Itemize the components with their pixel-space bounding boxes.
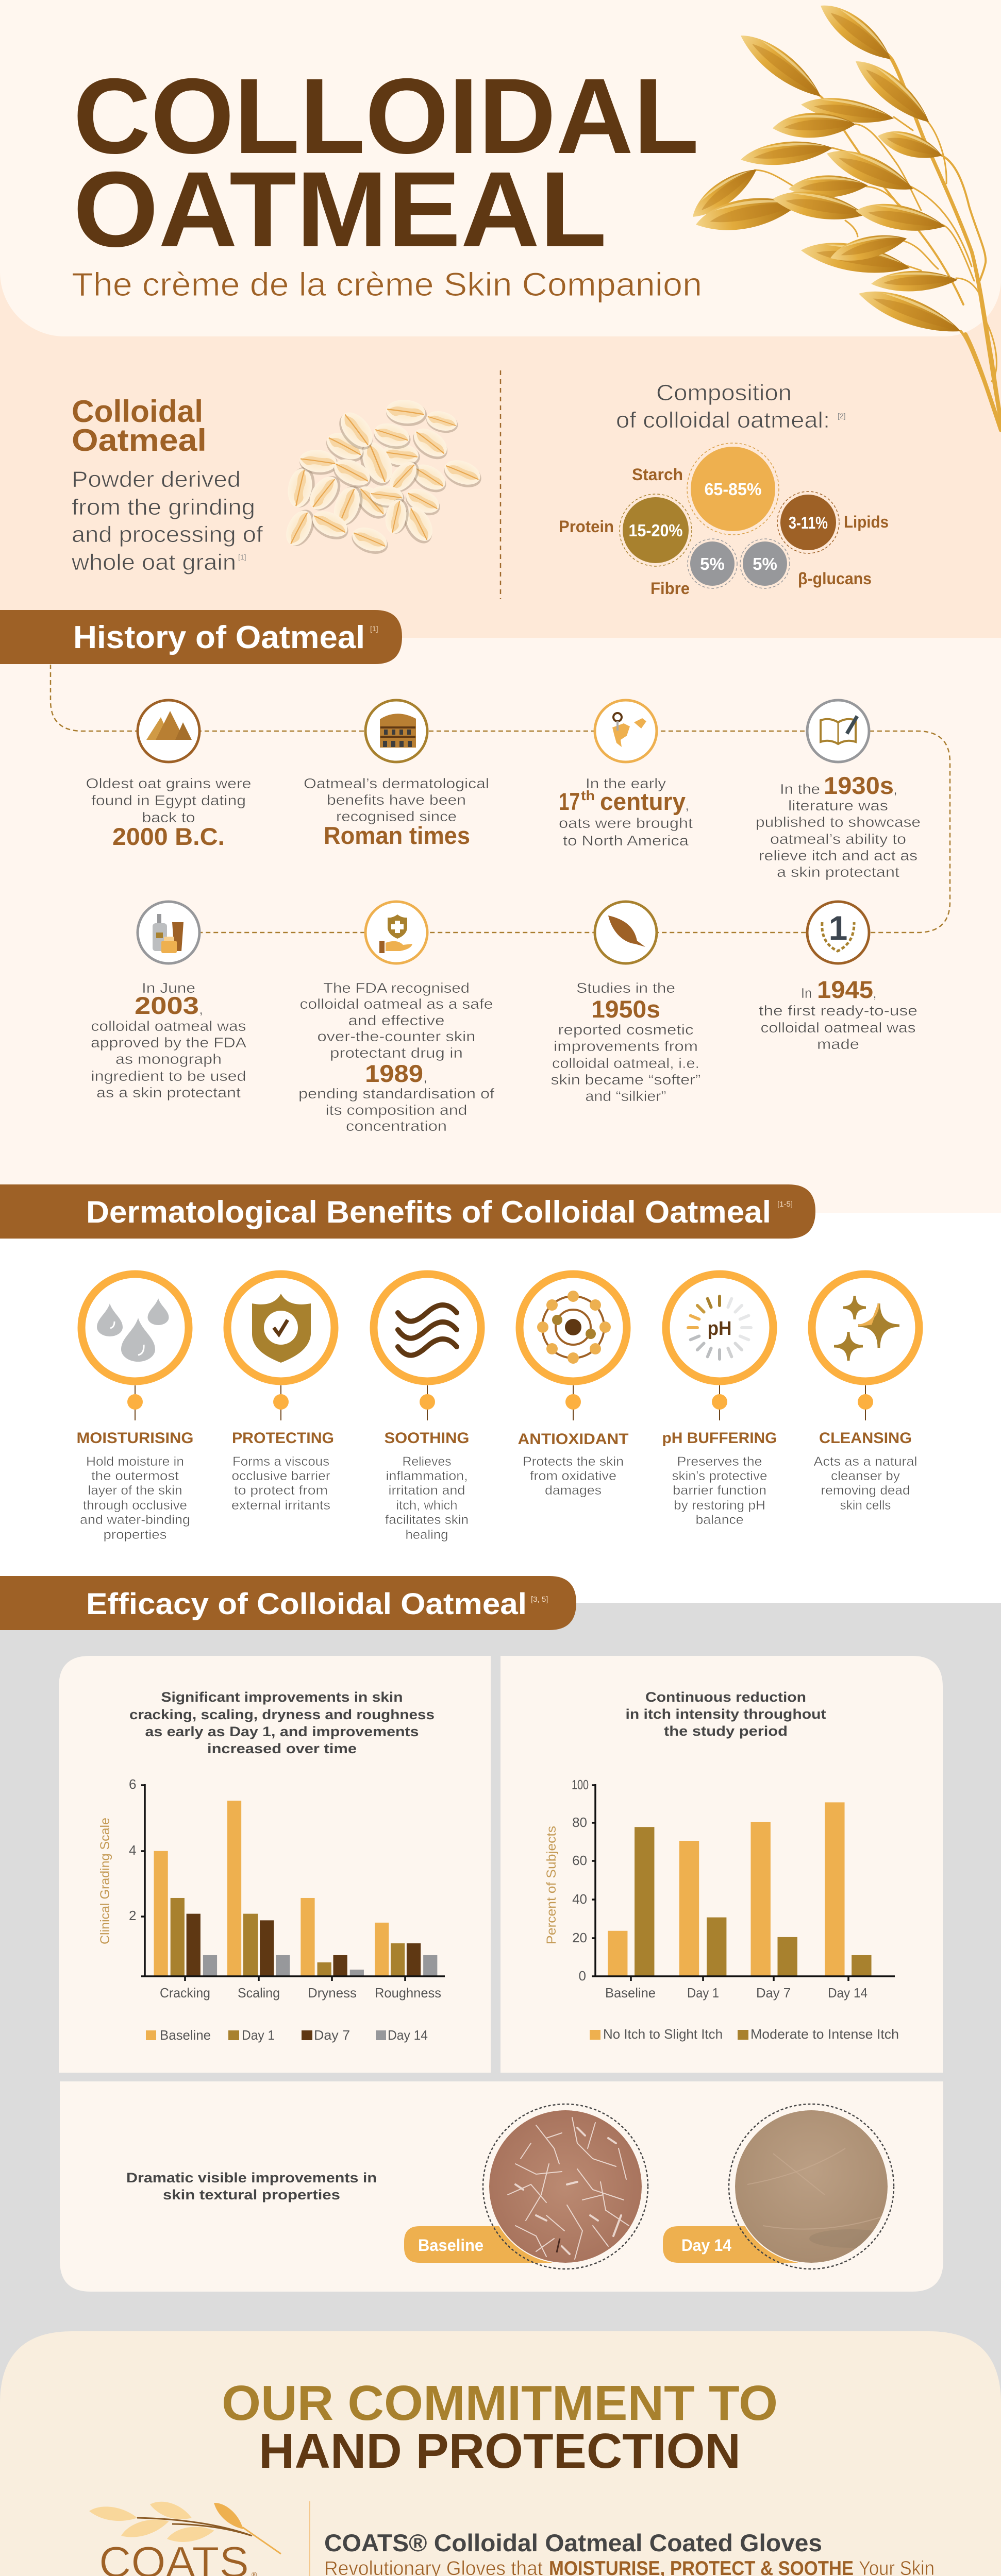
bar chart: clinical grading: Cracking	[160, 1985, 210, 2001]
timeline item: 1989: ,	[423, 1069, 427, 1085]
header panel	[0, 0, 1001, 336]
timeline item: 2003: as monograph	[115, 1051, 222, 1067]
bar chart: percent of subjects: 100	[572, 1777, 589, 1792]
timeline item: 17th century: 17	[559, 788, 580, 815]
timeline item: Roman times: Roman times	[324, 822, 470, 849]
benefit: protecting: PROTECTING	[232, 1430, 334, 1447]
chart heading: the study period	[664, 1723, 788, 1739]
timeline item: 1950s: improvements from	[554, 1038, 698, 1054]
timeline item: 1930s: ,	[893, 781, 897, 797]
divider	[500, 370, 501, 599]
benefit: soothing: inflammation,	[386, 1469, 468, 1483]
icon: sparkles	[812, 1274, 919, 1420]
timeline item: 1989: concentration	[346, 1118, 447, 1134]
timeline item: 1930s: literature was	[788, 798, 888, 814]
history section background	[0, 638, 1001, 1213]
bar chart: percent of subjects: 40	[572, 1891, 587, 1907]
heading: commitment: HAND PROTECTION	[259, 2424, 741, 2479]
timeline item: 1950s: colloidal oatmeal, i.e.	[552, 1055, 699, 1071]
timeline item: 1930s: In the	[780, 781, 820, 797]
composition labels: β-glucans	[798, 569, 872, 588]
bubble: fibre: 5%	[700, 554, 725, 573]
benefit: cleansing: skin cells	[840, 1498, 891, 1513]
benefit: moisturising: properties	[103, 1528, 167, 1542]
benefit: antioxidant: from oxidative	[530, 1469, 616, 1483]
composition heading: [2]	[838, 412, 846, 420]
timeline item: 1989: its composition and	[326, 1102, 467, 1118]
description: Powder derived	[72, 467, 241, 492]
timeline item: 1989: and effective	[348, 1012, 444, 1028]
benefit: pH buffering	[662, 1274, 777, 1527]
benefit: soothing: Relieves	[402, 1454, 452, 1469]
benefit: cleansing	[812, 1274, 919, 1513]
icon: atom	[520, 1274, 627, 1420]
timeline item: 2003: ingredient to be used	[91, 1068, 246, 1084]
heading: commitment	[222, 2376, 778, 2479]
chart heading: in itch intensity throughout	[626, 1706, 826, 1722]
timeline item: 1989: pending standardisation of	[298, 1086, 494, 1101]
icon: skincare products	[138, 902, 199, 963]
photo: day 14 skin: Day 14	[681, 2236, 731, 2255]
timeline item: Roman times: Oatmeal’s dermatological	[304, 775, 489, 791]
legend	[590, 2026, 899, 2042]
timeline item: 2000 BC: back to	[142, 809, 195, 825]
timeline item: 17th century: In the early	[586, 775, 666, 791]
bubble: starch	[687, 443, 779, 535]
efficacy banner	[0, 1576, 576, 1630]
timeline item: Roman times: benefits have been	[327, 792, 466, 808]
timeline item: 2000 BC: found in Egypt dating	[91, 792, 246, 808]
benefit: protecting: to protect from	[234, 1483, 328, 1498]
chart heading	[626, 1689, 826, 1739]
photo: baseline skin	[404, 2104, 648, 2269]
benefit: soothing	[374, 1274, 481, 1542]
icon: pyramids	[138, 700, 199, 762]
timeline item: 1950s: Studies in the	[576, 980, 675, 996]
divider	[309, 2501, 310, 2576]
timeline item: 2000 BC	[86, 700, 252, 850]
description: from the grinding	[72, 495, 255, 520]
bar chart: percent of subjects: Day 1	[687, 1985, 719, 2001]
efficacy banner: Efficacy of Colloidal Oatmeal	[86, 1587, 527, 1621]
timeline item: 1945: the first ready-to-use	[759, 1003, 917, 1019]
chart heading: increased over time	[207, 1741, 357, 1756]
legend: No Itch to Slight Itch	[603, 2026, 723, 2042]
benefits banner	[0, 1184, 815, 1239]
commitment section background	[0, 2331, 1001, 2576]
icon: waves	[374, 1274, 481, 1420]
bubble: protein	[620, 494, 692, 566]
chart heading: Continuous reduction	[645, 1689, 806, 1705]
timeline item: 1930s: relieve itch and act as	[759, 848, 917, 863]
benefit: protecting: Forms a viscous	[232, 1454, 329, 1469]
timeline item: 1930s: a skin protectant	[777, 864, 899, 880]
page background: peach section	[0, 0, 1001, 638]
timeline item: 2000 BC: Oldest oat grains were	[86, 775, 252, 791]
timeline item: 1945: 1945	[817, 976, 873, 1003]
benefit: moisturising	[76, 1274, 194, 1542]
benefit: antioxidant	[518, 1274, 629, 1498]
benefit: moisturising: and water-binding	[80, 1513, 190, 1527]
efficacy section background	[0, 1603, 1001, 2427]
timeline item: 17th century: century	[600, 788, 686, 815]
timeline item: 1989: colloidal oatmeal as a safe	[300, 996, 493, 1012]
timeline item: 2003: as a skin protectant	[96, 1084, 241, 1100]
benefit: pH buffering: barrier function	[673, 1483, 766, 1498]
bar chart: clinical grading	[98, 1776, 445, 2001]
composition labels: Fibre	[650, 579, 690, 598]
benefit: pH buffering: Preserves the	[677, 1454, 762, 1469]
chart heading	[129, 1689, 435, 1756]
composition heading: of colloidal oatmeal:	[616, 408, 830, 433]
timeline item: 1950s: skin became “softer”	[550, 1072, 701, 1088]
title: COLLOIDAL	[73, 57, 699, 176]
timeline item: 2003	[91, 902, 246, 1100]
benefit: moisturising: Hold moisture in	[86, 1454, 184, 1469]
illustration: oat flakes	[281, 398, 485, 558]
benefit: moisturising: layer of the skin	[88, 1483, 182, 1498]
legend: Day 7	[314, 2027, 350, 2043]
timeline item: 17th century	[559, 700, 693, 849]
benefit: antioxidant: damages	[545, 1483, 602, 1498]
caption: skin textural properties	[163, 2187, 340, 2202]
icon: feather	[595, 902, 657, 963]
bar chart: clinical grading: Dryness	[308, 1985, 357, 2001]
timeline item: 1945: ,	[873, 985, 877, 1001]
legend	[146, 2027, 428, 2043]
bar chart: percent of subjects: 60	[572, 1853, 587, 1868]
timeline item: 1989: 1989	[365, 1060, 423, 1087]
title: OATMEAL	[73, 150, 607, 269]
bar chart: percent of subjects: Percent of Subjects	[544, 1826, 559, 1944]
benefit: soothing: healing	[405, 1528, 448, 1542]
benefit: moisturising: through occlusive	[83, 1498, 187, 1513]
timeline item: 1930s: 1930s	[824, 772, 894, 799]
benefit: soothing: facilitates skin	[385, 1513, 469, 1527]
heading: Oatmeal	[72, 423, 207, 457]
bar chart: clinical grading: 4	[129, 1842, 136, 1858]
timeline item: 2003: In June	[142, 980, 195, 996]
panel: visible skin improvements	[60, 2081, 943, 2292]
bar chart: clinical grading: 6	[129, 1776, 136, 1792]
bar chart: percent of subjects: Baseline	[605, 1985, 656, 2001]
icon: pH dial	[666, 1274, 773, 1420]
legend: Baseline	[160, 2027, 211, 2043]
benefit: pH buffering: skin’s protective	[672, 1469, 767, 1483]
heading	[72, 394, 207, 457]
benefit: soothing: itch, which	[396, 1498, 458, 1513]
benefits section background	[0, 1213, 1001, 1603]
icon: shield over hand	[365, 902, 427, 963]
timeline item: 1989	[298, 902, 494, 1134]
icon: open book and pen	[807, 700, 869, 762]
icon: pH dial: pH	[707, 1318, 732, 1340]
timeline item: 17th century: to North America	[563, 833, 689, 849]
chart heading: as early as Day 1, and improvements	[145, 1724, 419, 1739]
heading: commitment: OUR COMMITMENT TO	[222, 2376, 778, 2431]
timeline item: 1930s	[756, 700, 921, 880]
caption: Dramatic visible improvements in	[126, 2170, 377, 2185]
benefit: antioxidant: Protects the skin	[523, 1454, 624, 1469]
icon: shield with check	[227, 1274, 335, 1420]
legend: Day 14	[388, 2027, 428, 2043]
legend: Moderate to Intense Itch	[750, 2026, 899, 2042]
timeline item: 1989: The FDA recognised	[323, 980, 470, 996]
benefit: soothing: SOOTHING	[385, 1430, 469, 1447]
benefit: moisturising: MOISTURISING	[76, 1430, 194, 1447]
timeline item: 2000 BC: 2000 B.C.	[112, 823, 225, 850]
heading: Colloidal	[72, 394, 203, 429]
bubble: beta-glucans	[740, 539, 790, 588]
composition heading: Composition	[656, 380, 792, 405]
panel: colloidal oatmeal definition	[71, 394, 263, 575]
caption	[126, 2170, 377, 2202]
subtitle: The crème de la crème Skin Companion	[72, 266, 702, 303]
benefit: protecting	[227, 1274, 335, 1513]
history banner	[0, 610, 402, 664]
panel: composition of colloidal oatmeal	[559, 380, 889, 598]
timeline item: 1950s: reported cosmetic	[558, 1022, 694, 1038]
timeline item: 17th century: oats were brought	[559, 815, 693, 831]
timeline item: 2003: 2003	[135, 992, 199, 1019]
description: [1]	[238, 553, 246, 561]
bar chart: percent of subjects: Day 7	[756, 1985, 791, 2001]
photo: day 14 skin	[663, 2104, 894, 2269]
bar chart: clinical grading: Scaling	[238, 1985, 280, 2001]
description	[71, 467, 263, 575]
timeline item: 1989: protectant drug in	[330, 1045, 463, 1061]
composition labels: Lipids	[844, 513, 889, 531]
bubble: beta-glucans: 5%	[753, 554, 777, 573]
bar chart: clinical grading: Roughness	[375, 1985, 441, 2001]
bar chart: percent of subjects: Day 14	[828, 1985, 867, 2001]
icon: colosseum	[365, 700, 427, 762]
benefit: cleansing: removing dead	[821, 1483, 910, 1498]
icon: water drops	[81, 1274, 189, 1420]
timeline item: 1945: made	[817, 1036, 859, 1052]
benefit: moisturising: the outermost	[91, 1469, 179, 1483]
product heading: COATS® Colloidal Oatmeal Coated Gloves	[324, 2529, 822, 2556]
bar chart: percent of subjects: 20	[572, 1930, 587, 1945]
benefit: cleansing: Acts as a natural	[813, 1454, 917, 1469]
bubble: fibre	[688, 539, 737, 588]
timeline item: 1945: In	[801, 985, 812, 1001]
COATS logo	[88, 2497, 281, 2576]
timeline item: Roman times: recognised since	[336, 808, 457, 824]
timeline item: 17th century: th	[581, 788, 595, 803]
bar chart: percent of subjects	[544, 1777, 895, 2001]
bar chart: clinical grading: Clinical Grading Scale	[98, 1818, 112, 1944]
benefit: antioxidant: ANTIOXIDANT	[518, 1431, 629, 1448]
efficacy banner: [3, 5]	[531, 1595, 548, 1604]
timeline item: 1930s: oatmeal’s ability to	[770, 831, 906, 847]
chart heading: cracking, scaling, dryness and roughness	[129, 1707, 435, 1722]
bubble: lipids: 3-11%	[789, 513, 828, 532]
panel: itch reduction chart	[500, 1656, 943, 2073]
bar chart: percent of subjects: 0	[579, 1968, 586, 1984]
history banner: History of Oatmeal	[73, 620, 365, 655]
history banner: [1]	[370, 624, 378, 633]
bubble: lipids	[777, 492, 839, 553]
benefits banner: [1-5]	[777, 1200, 793, 1209]
description: and processing of	[72, 522, 263, 547]
illustration: oat plant	[686, 0, 1001, 430]
composition labels: Starch	[632, 465, 683, 484]
timeline item: 2003: colloidal oatmeal was	[91, 1018, 246, 1034]
composition heading	[616, 380, 846, 433]
benefits banner: Dermatological Benefits of Colloidal Oatmeal	[86, 1195, 771, 1229]
benefit: soothing: irritation and	[389, 1483, 465, 1498]
timeline item: 17th century: ,	[685, 797, 689, 813]
bar chart: clinical grading: 2	[129, 1908, 136, 1923]
timeline item: 2003: approved by the FDA	[91, 1035, 246, 1050]
benefit: pH buffering: by restoring pH	[674, 1498, 765, 1513]
description: whole oat grain	[71, 550, 236, 575]
benefit: protecting: external irritants	[231, 1498, 330, 1513]
timeline item: 1950s	[550, 902, 701, 1104]
timeline item: 1950s: 1950s	[591, 995, 660, 1023]
timeline item: 1930s: published to showcase	[756, 814, 921, 830]
bubble: starch: 65-85%	[704, 480, 762, 499]
timeline item: 1950s: and “silkier”	[586, 1088, 666, 1104]
benefit: cleansing: cleanser by	[831, 1469, 900, 1483]
chart heading: Significant improvements in skin	[161, 1689, 403, 1705]
benefit: protecting: occlusive barrier	[232, 1469, 330, 1483]
panel: skin improvement chart	[59, 1656, 491, 2073]
composition labels: Protein	[559, 517, 614, 536]
benefit: cleansing: CLEANSING	[819, 1430, 912, 1447]
icon: number one with laurel	[807, 902, 869, 963]
product heading	[324, 2529, 935, 2576]
timeline item: Roman times	[304, 700, 489, 849]
bar chart: percent of subjects: 80	[572, 1815, 587, 1830]
icon: number one with laurel: 1	[829, 909, 847, 947]
bubble: protein: 15-20%	[629, 521, 682, 540]
timeline connector	[51, 665, 950, 933]
timeline item: 1989: over-the-counter skin	[318, 1028, 475, 1044]
benefit: pH buffering: balance	[696, 1513, 743, 1527]
composition labels	[559, 465, 889, 598]
title	[73, 57, 699, 269]
icon: North America map pin	[595, 700, 657, 762]
timeline item: 1945: colloidal oatmeal was	[761, 1020, 915, 1036]
timeline item: 1945	[759, 902, 917, 1052]
photo: baseline skin: Baseline	[418, 2236, 483, 2255]
timeline item: 2003: ,	[199, 1001, 203, 1017]
benefit: pH buffering: pH BUFFERING	[662, 1430, 777, 1447]
legend: Day 1	[242, 2027, 275, 2043]
